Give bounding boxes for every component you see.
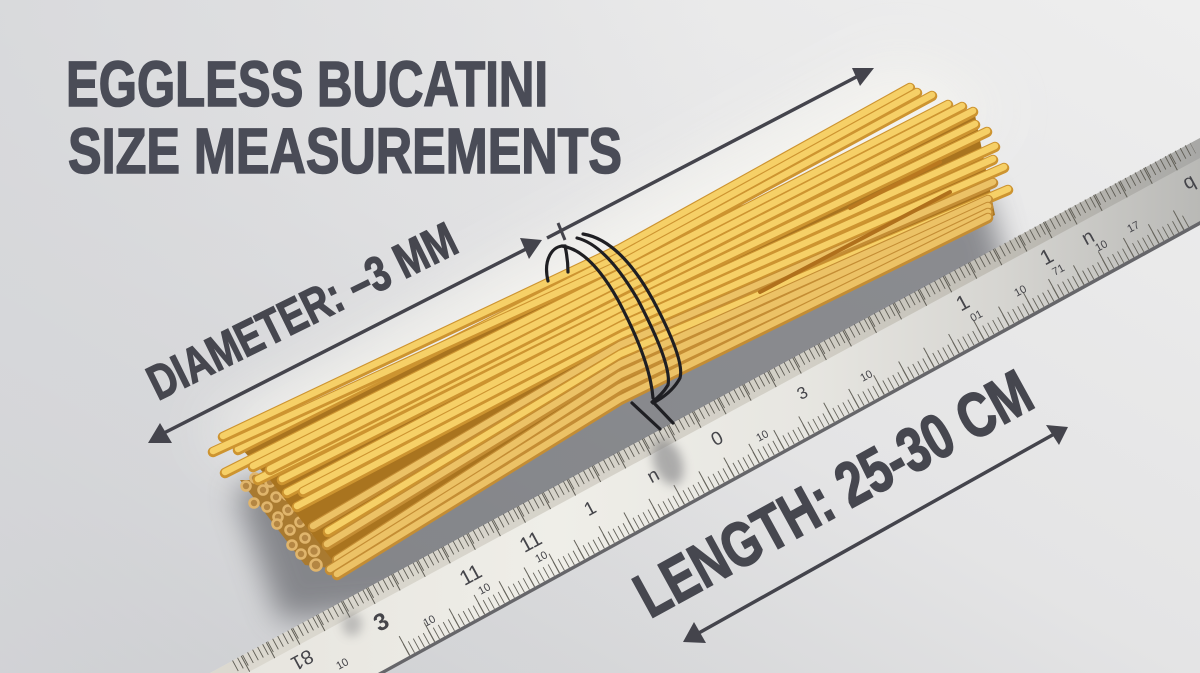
- arrow: length: [683, 425, 1068, 643]
- ruler numbers: 1: [581, 497, 600, 521]
- ruler numbers: 10: [754, 428, 771, 445]
- title: EGGLESS BUCATINI: [66, 48, 548, 120]
- pasta bundle: [213, 87, 1008, 575]
- ruler: [210, 138, 1200, 673]
- ruler numbers: 11: [516, 527, 546, 558]
- ruler numbers: 1: [952, 290, 974, 316]
- ruler numbers: 10: [421, 613, 438, 630]
- ruler numbers: 10: [858, 368, 875, 385]
- label: diameter: DIAMETER: –3 MM: [139, 213, 466, 411]
- bundle shadow: [235, 190, 1010, 620]
- ruler numbers: 10: [1012, 283, 1029, 300]
- ruler numbers: n: [1078, 225, 1098, 250]
- ruler numbers: 0: [708, 427, 727, 451]
- ruler numbers: [287, 171, 1200, 673]
- ruler numbers: b: [1180, 171, 1200, 196]
- ruler numbers: n: [644, 464, 663, 488]
- strands: [213, 87, 1008, 575]
- wire loops around bundle: [547, 234, 681, 429]
- ruler numbers: 10: [334, 656, 351, 673]
- ruler numbers: 11: [456, 560, 486, 591]
- ruler numbers: 3: [794, 383, 811, 404]
- ruler numbers: 10: [476, 581, 493, 598]
- ruler numbers: 1: [1036, 244, 1058, 270]
- title: [66, 48, 622, 187]
- ruler numbers: 10: [1093, 238, 1110, 255]
- ruler numbers: 10: [533, 549, 550, 566]
- ruler numbers: 3: [369, 607, 394, 637]
- arrow: diameter: [148, 68, 874, 443]
- label: length: LENGTH: 25-30 CM: [623, 357, 1044, 631]
- ruler numbers: 01: [968, 308, 985, 325]
- title: SIZE MEASUREMENTS: [68, 115, 622, 187]
- dark gaps between strands: [240, 115, 995, 570]
- cut ends: [240, 474, 345, 570]
- ruler numbers: 71: [1050, 262, 1067, 279]
- ruler numbers: 17: [1125, 219, 1142, 236]
